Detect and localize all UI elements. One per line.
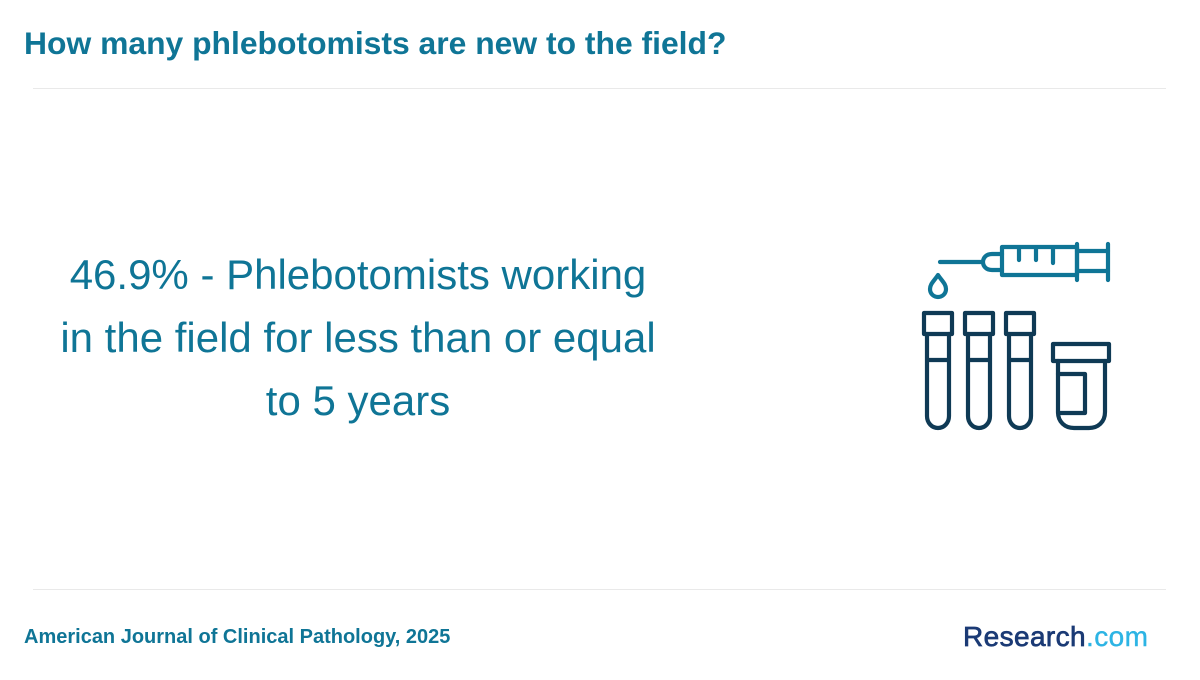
source citation: American Journal of Clinical Pathology, 2025 (24, 626, 450, 648)
icon: syringe, blood drop, test tubes and specimen jar (922, 242, 1112, 430)
title: How many phlebotomists are new to the field? (24, 25, 726, 61)
logo: Research.com: Research.com (963, 621, 1148, 652)
icon: syringe (940, 244, 1108, 280)
main statistic text (60, 251, 656, 424)
main statistic text: 46.9% - Phlebotomists working (70, 251, 646, 298)
icon: specimen jar (1053, 344, 1109, 428)
main statistic text: to 5 years (266, 377, 450, 424)
icon: test tubes (924, 313, 1034, 428)
icon: blood drop (930, 275, 946, 297)
main statistic text: in the field for less than or equal (60, 314, 656, 361)
